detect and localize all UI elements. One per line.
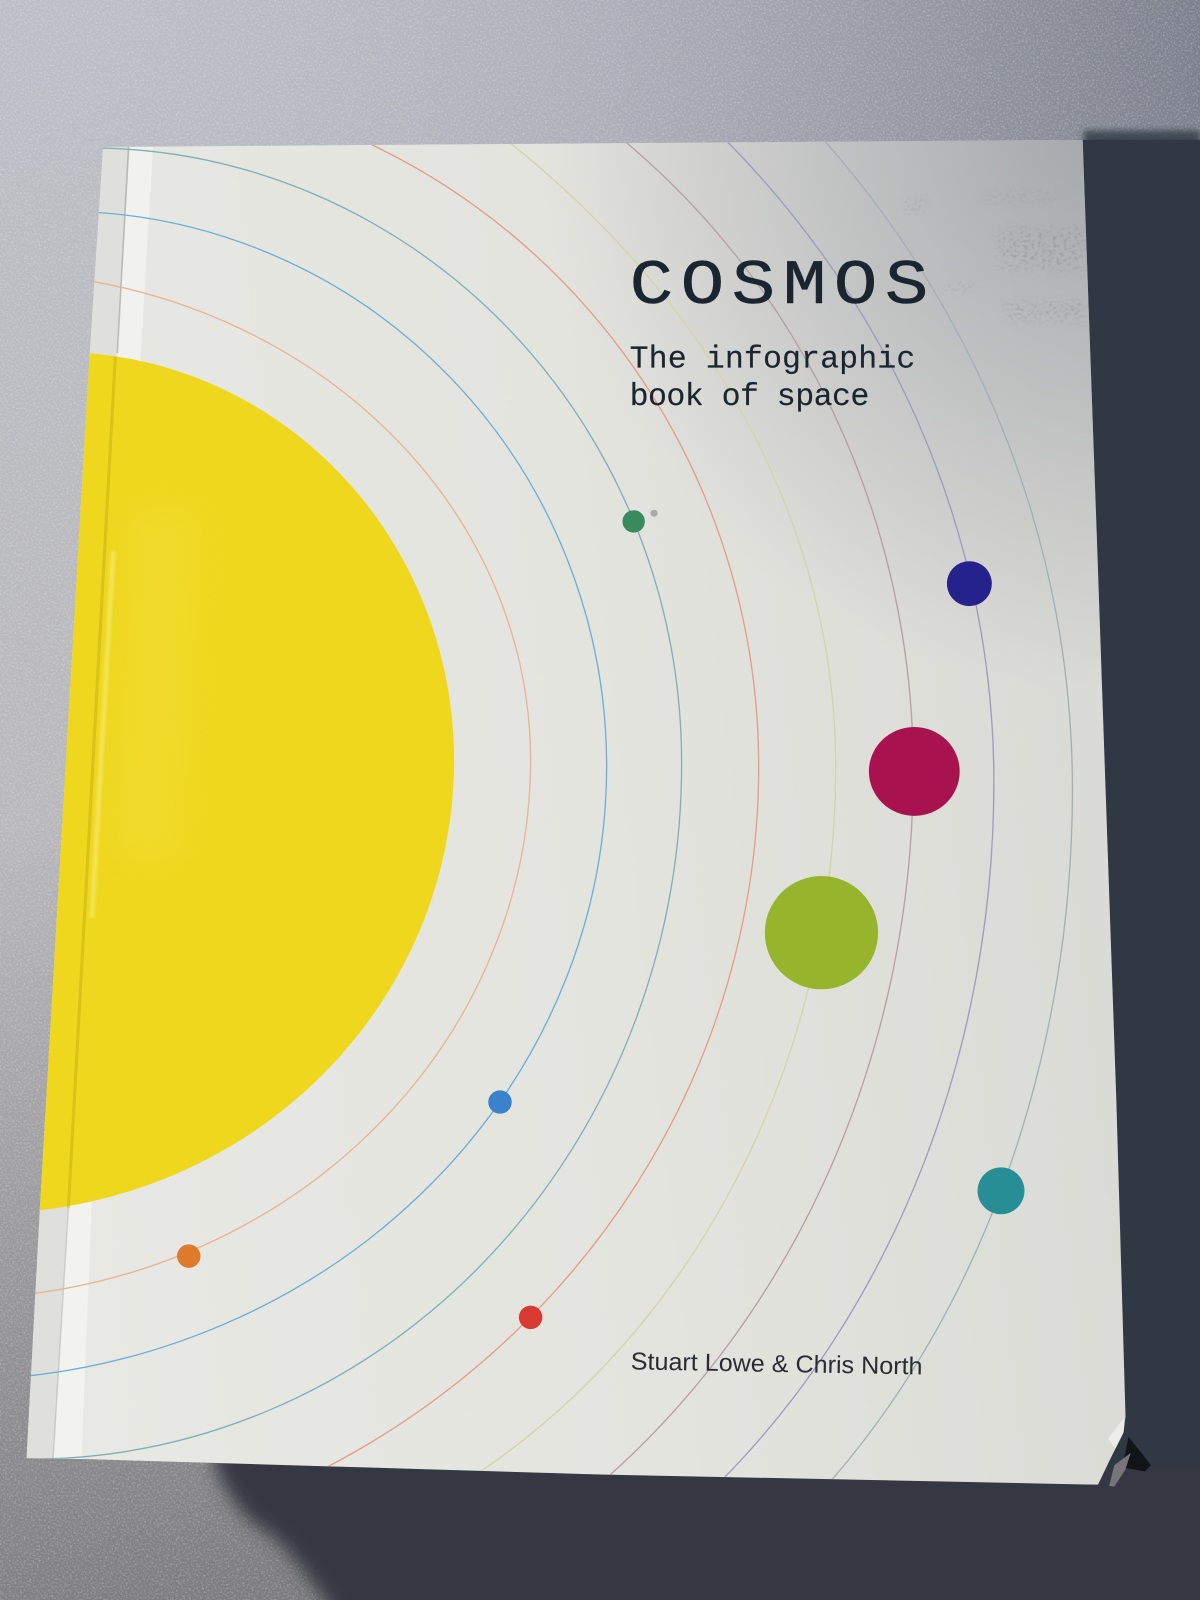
- orbit lines: [0, 133, 1072, 1485]
- subtitle: [630, 342, 915, 415]
- orbit 2: blue: [0, 211, 607, 1379]
- lower spine crease: [53, 1208, 68, 1459]
- planets: [177, 510, 1024, 1329]
- moon: grey: [651, 510, 658, 517]
- planet: green: [622, 510, 645, 533]
- corner crease highlight: [1108, 1418, 1124, 1449]
- planet: olive: [765, 876, 878, 989]
- orbit 3: teal: [29, 148, 682, 1459]
- orbit 5: olive: [468, 133, 836, 1480]
- subtitle: The infographic: [630, 342, 915, 377]
- book cover: [26, 140, 1126, 1485]
- planet: red: [519, 1306, 542, 1329]
- worn book corner: [1109, 1437, 1151, 1487]
- planet: blue: [488, 1090, 512, 1114]
- planet: orange: [177, 1244, 201, 1268]
- orbit 8: grey teal: [817, 133, 1072, 1485]
- spine band: [27, 147, 153, 1459]
- orbit 7: indigo: [717, 133, 994, 1485]
- subtitle: book of space: [630, 380, 869, 415]
- orbit 1: orange: [0, 277, 531, 1297]
- planet: navy: [947, 561, 992, 606]
- scuff marks: [902, 194, 1087, 320]
- planet: magenta: [869, 727, 960, 816]
- planet: teal: [978, 1167, 1024, 1214]
- orbit 6: mauve: [599, 133, 913, 1485]
- sun: [0, 352, 454, 1213]
- title: COSMOS: [630, 251, 936, 323]
- sun glare and spine gloss: [68, 357, 199, 1208]
- spine crease: [117, 147, 129, 353]
- book cast shadow: [214, 131, 1200, 1600]
- authors: Stuart Lowe & Chris North: [631, 1348, 923, 1380]
- orbit 4: red: [302, 133, 759, 1480]
